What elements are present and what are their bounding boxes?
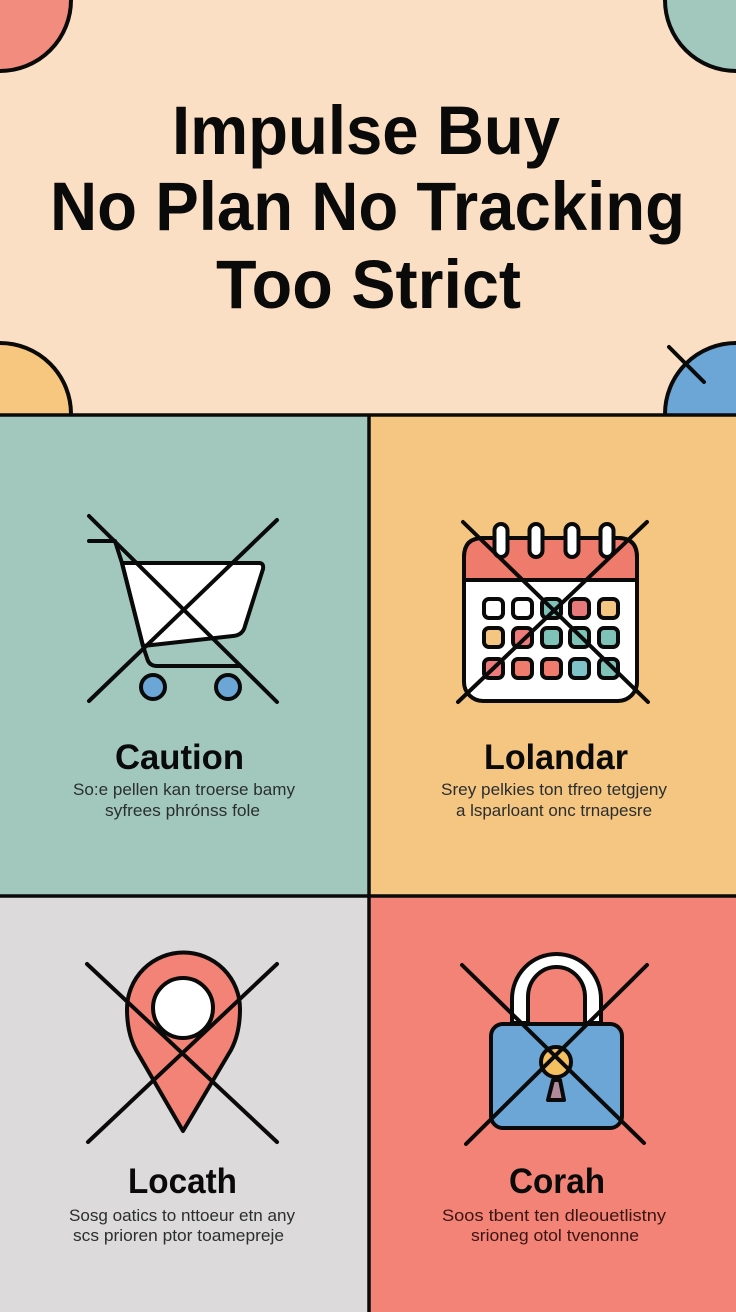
text block: location description: Sosg oatics to nttoeur etn any: [69, 1207, 296, 1225]
panel: lock: [369, 896, 736, 1312]
text block: location description: [69, 1207, 296, 1245]
text block: lock description: srioneg otol tvenonne: [471, 1227, 639, 1245]
panel: header: [0, 0, 736, 485]
heading: Caution: Caution: [115, 738, 244, 777]
corner circle: top right teal: [665, 0, 736, 71]
text block: caution description: So:e pellen kan troerse bamy: [73, 781, 296, 799]
icon: crossed-out shopping cart: [89, 516, 277, 702]
corner circle: bottom left orange: [0, 343, 71, 485]
text block: calendar description: [441, 781, 668, 820]
text block: location description: scs prioren ptor toamepreje: [73, 1227, 284, 1245]
panel: calendar: [369, 416, 736, 896]
text block: lock description: Soos tbent ten dleouetlistny: [442, 1207, 667, 1225]
grid dividers: [0, 415, 736, 1312]
title: [50, 92, 685, 323]
text block: lock description: [442, 1207, 667, 1245]
text block: caution description: [73, 781, 296, 820]
heading: Corah: Corah: [509, 1162, 605, 1201]
corner circle: bottom right blue with strike: [665, 343, 736, 485]
heading: Lolandar: Lolandar: [484, 738, 628, 777]
panel: location: [0, 896, 369, 1312]
corner circle: top left coral: [0, 0, 71, 71]
panel: caution cart: [0, 416, 369, 896]
icon: crossed-out calendar: [458, 522, 648, 702]
title: No Plan No Tracking: [50, 168, 685, 245]
title: Too Strict: [216, 246, 521, 323]
heading: Locath: Locath: [128, 1162, 237, 1201]
icon: crossed-out map pin: [87, 953, 277, 1142]
text block: calendar description: a lsparloant onc trnapesre: [456, 802, 652, 820]
title: Impulse Buy: [172, 92, 560, 169]
text block: calendar description: Srey pelkies ton tfreo tetgjeny: [441, 781, 668, 799]
text block: caution description: syfrees phrónss fole: [105, 802, 260, 820]
icon: crossed-out padlock: [462, 954, 647, 1144]
